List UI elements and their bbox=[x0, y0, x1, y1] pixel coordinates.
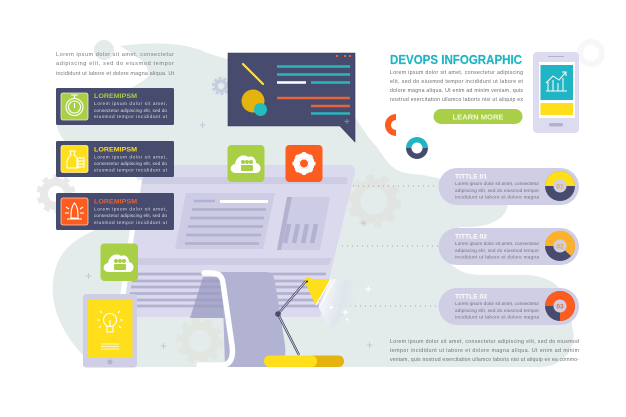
desk lamp bbox=[264, 278, 371, 367]
intro text right: dolore magna aliqua. Ut enim ad minim veniam, quis bbox=[390, 88, 523, 94]
speech bubble code window bbox=[228, 53, 355, 142]
panel: loremipsm 1: Lorem ipsum dolor sit amet, bbox=[94, 101, 167, 106]
plus marks: + bbox=[160, 339, 167, 353]
intro text right: Lorem ipsum dolor sit amet, consectetur adipiscing bbox=[390, 70, 523, 76]
white strip behind monitor bbox=[122, 180, 140, 300]
bottom text right bbox=[390, 339, 579, 363]
intro text right: nostrud exercitation ullamco laboris nisi ut aliquip ex bbox=[390, 97, 523, 103]
donut 01: 01 bbox=[556, 184, 564, 190]
icon: light bulb bbox=[97, 311, 123, 349]
donut 02: 02 bbox=[556, 244, 564, 250]
panel: loremipsm 2: LOREMIPSM bbox=[94, 146, 137, 154]
panel: loremipsm 3 bbox=[56, 193, 174, 230]
panel: loremipsm 1: LOREMIPSM bbox=[94, 93, 137, 100]
pill: title 02: incididunt ut labore et dolore magna bbox=[455, 254, 539, 260]
intro text top left: incididunt ut labore et dolore magna aliqua. Ut bbox=[56, 71, 174, 77]
intro text right bbox=[390, 70, 524, 103]
panel: loremipsm 3: eiusmod tempor incididunt ut bbox=[94, 220, 168, 225]
icon: cloud green lower bbox=[100, 244, 138, 281]
bottom text right: tempor incididunt ut labore et dolore magna aliqua. Ut enim ad minim bbox=[390, 348, 579, 354]
plus marks: + bbox=[199, 118, 206, 132]
bottom text right: Lorem ipsum dolor sit amet, consectetur adipiscing elit, sed do eiusmod bbox=[390, 339, 579, 345]
heading: DEVOPS INFOGRAPHIC bbox=[390, 53, 522, 67]
desk lamp: + bbox=[365, 284, 371, 296]
intro text top left: adipiscing elit, sed do eiusmod tempor bbox=[56, 61, 174, 67]
icon: money bag and coins bbox=[67, 151, 84, 168]
monitor chart panel bbox=[277, 197, 330, 250]
icon: stopwatch bbox=[66, 95, 83, 116]
pill: title 02: adipiscing elit, sed do eiusmod tempor bbox=[455, 248, 539, 253]
background blob bbox=[53, 40, 574, 367]
panel: loremipsm 1 bbox=[56, 88, 174, 125]
monitor text panel bbox=[175, 193, 275, 249]
decorative rings bbox=[385, 114, 428, 159]
plus marks: + bbox=[360, 216, 367, 230]
pill: title 03: incididunt ut labore et dolore magna bbox=[455, 314, 539, 320]
bottom text right: veniam, quis nostrud exercitation ullamco laboris nisi ut aliquip ex ea commo- bbox=[390, 357, 579, 363]
intro text top left bbox=[56, 52, 174, 77]
plus marks: + bbox=[366, 338, 373, 352]
dotted connectors bbox=[335, 186, 438, 306]
panel: loremipsm 2 bbox=[56, 141, 174, 177]
speech bubble code window: + bbox=[344, 117, 350, 128]
panel: loremipsm 2: Lorem ipsum dolor sit amet, bbox=[94, 154, 167, 160]
monitor stand bbox=[190, 272, 285, 367]
button: learn more: LEARN MORE bbox=[452, 112, 504, 122]
panel: loremipsm 3: Lorem ipsum dolor sit amet, bbox=[94, 206, 167, 212]
panel: loremipsm 2: eiusmod tempor incididunt ut bbox=[94, 168, 168, 172]
panel: loremipsm 3: LOREMIPSM bbox=[94, 198, 137, 206]
pill: title 03: adipiscing elit, sed do eiusmod tempor bbox=[455, 308, 539, 313]
donut 01 bbox=[545, 171, 575, 201]
plus marks: + bbox=[85, 269, 92, 283]
pill: title 01 bbox=[438, 168, 579, 205]
pill: title 03: Lorem ipsum dolor sit amet, consectetur bbox=[455, 301, 539, 306]
plus marks bbox=[85, 118, 373, 353]
intro text right: elit, sed do eiusmod tempor incididunt ut labore et bbox=[390, 79, 524, 85]
donut 03: 03 bbox=[556, 304, 564, 310]
donut 02 bbox=[545, 231, 575, 261]
tablet with light bulb bbox=[83, 294, 137, 368]
panel: loremipsm 1: consectetur adipiscing elit, sed do bbox=[94, 108, 167, 113]
icon: cloud green top bbox=[228, 145, 264, 182]
panel: loremipsm 3: consectetur adipiscing elit, sed do bbox=[94, 213, 167, 218]
desk lamp: + bbox=[345, 317, 349, 324]
panel: loremipsm 2: consectetur adipiscing elit, sed do bbox=[94, 161, 167, 166]
icon: gear orange bbox=[286, 145, 322, 182]
monitor bbox=[123, 165, 355, 317]
pill: title 01: Lorem ipsum dolor sit amet, consectetur bbox=[455, 181, 539, 186]
button: learn more bbox=[434, 109, 522, 124]
pill: title 02: Lorem ipsum dolor sit amet, consectetur bbox=[455, 241, 539, 246]
pill: title 03: TITTLE 03 bbox=[455, 294, 488, 300]
intro text top left: Lorem ipsum dolor sit amet, consectetur bbox=[56, 52, 174, 58]
pill: title 01: incididunt ut labore et dolore magna bbox=[455, 194, 539, 200]
donut 03 bbox=[545, 291, 575, 321]
pill: title 01: adipiscing elit, sed do eiusmod tempor bbox=[455, 188, 539, 193]
desk lamp: + bbox=[342, 307, 348, 319]
pill: title 02: TITTLE 02 bbox=[455, 234, 488, 240]
decorative gears bbox=[39, 42, 602, 362]
icon: rocket bbox=[65, 203, 84, 219]
pill: title 03 bbox=[438, 288, 579, 325]
pill: title 01: TITTLE 01 bbox=[455, 174, 488, 180]
phone bbox=[533, 52, 579, 133]
pill: title 02 bbox=[438, 228, 579, 265]
icon: growth chart bbox=[546, 72, 567, 91]
panel: loremipsm 1: eiusmod tempor incididunt ut bbox=[94, 114, 168, 119]
desk lamp: + bbox=[329, 303, 334, 312]
